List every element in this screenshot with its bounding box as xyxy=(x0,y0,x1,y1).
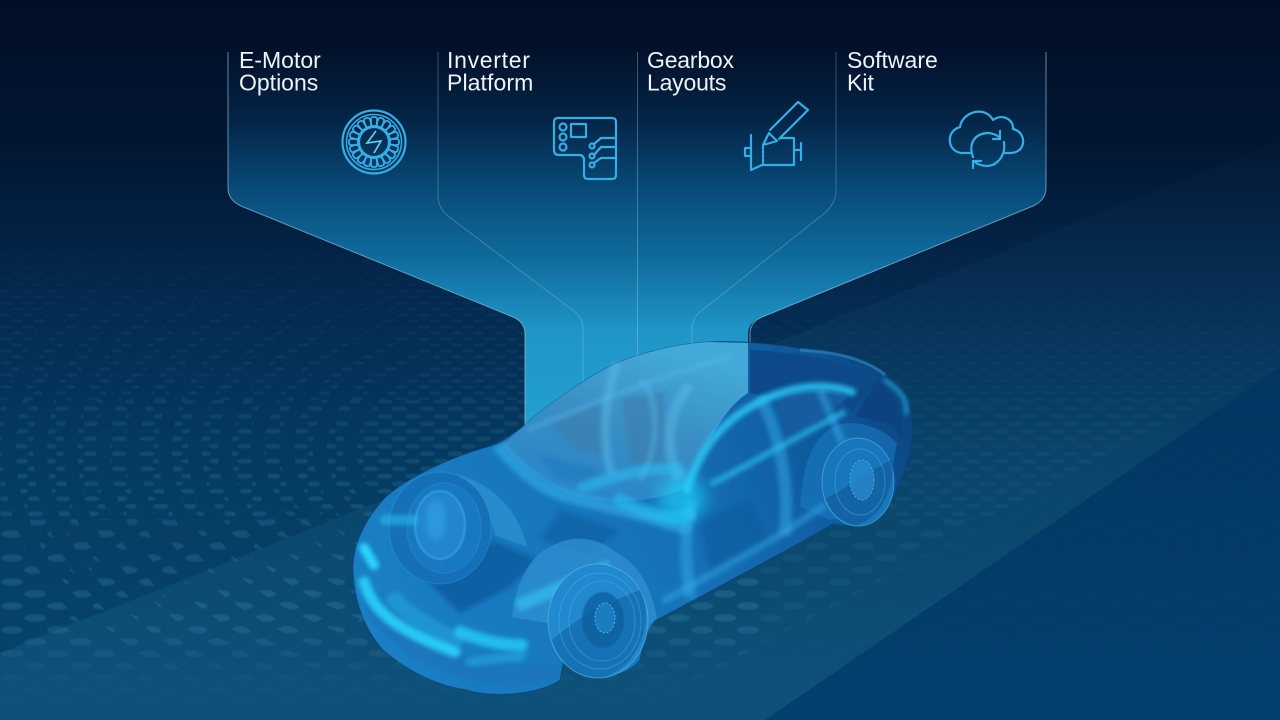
heading: E-Motor Options: E-Motor xyxy=(239,47,321,73)
car front bumper light glow xyxy=(364,380,906,662)
car rear window xyxy=(750,350,903,440)
car lower lip shade xyxy=(360,575,558,685)
car interior roof hoops xyxy=(527,357,730,480)
icon: e-motor stator xyxy=(342,110,406,174)
icon: inverter circuit board xyxy=(554,118,616,179)
floor lower-right dark area xyxy=(765,367,1280,720)
car rear wheel xyxy=(800,423,897,526)
car central glow xyxy=(658,476,706,520)
heading: Software Kit: Kit xyxy=(847,70,874,96)
heading: E-Motor Options: Options xyxy=(239,70,318,96)
car xyxy=(353,342,913,694)
car door dark panels xyxy=(540,430,830,575)
car far front wheel xyxy=(389,472,527,584)
panel outlines xyxy=(228,52,1046,480)
heading: Gearbox Layouts: Layouts xyxy=(647,70,726,96)
car near front wheel arch xyxy=(512,539,657,640)
heading: Gearbox Layouts: Gearbox xyxy=(647,47,734,73)
car body shell xyxy=(353,342,913,694)
car bright structure glow xyxy=(583,387,852,517)
car cabin interior shading xyxy=(540,392,665,485)
car glass canopy xyxy=(503,342,748,501)
car arch highlight strip xyxy=(517,566,610,606)
heading: Software Kit: Software xyxy=(847,47,938,73)
car side pillars xyxy=(662,390,842,602)
icon: gearbox with pencil xyxy=(745,102,808,170)
heading: Inverter Platform: Platform xyxy=(447,70,533,96)
car windshield base band xyxy=(498,445,690,530)
car near front wheel xyxy=(548,564,648,678)
floor dot pattern xyxy=(0,326,759,656)
light beam panels xyxy=(228,52,1046,480)
car hood recess xyxy=(397,540,537,613)
heading: Inverter Platform: Inverter xyxy=(447,47,531,73)
icon: software cloud with sync arrows xyxy=(950,112,1023,168)
